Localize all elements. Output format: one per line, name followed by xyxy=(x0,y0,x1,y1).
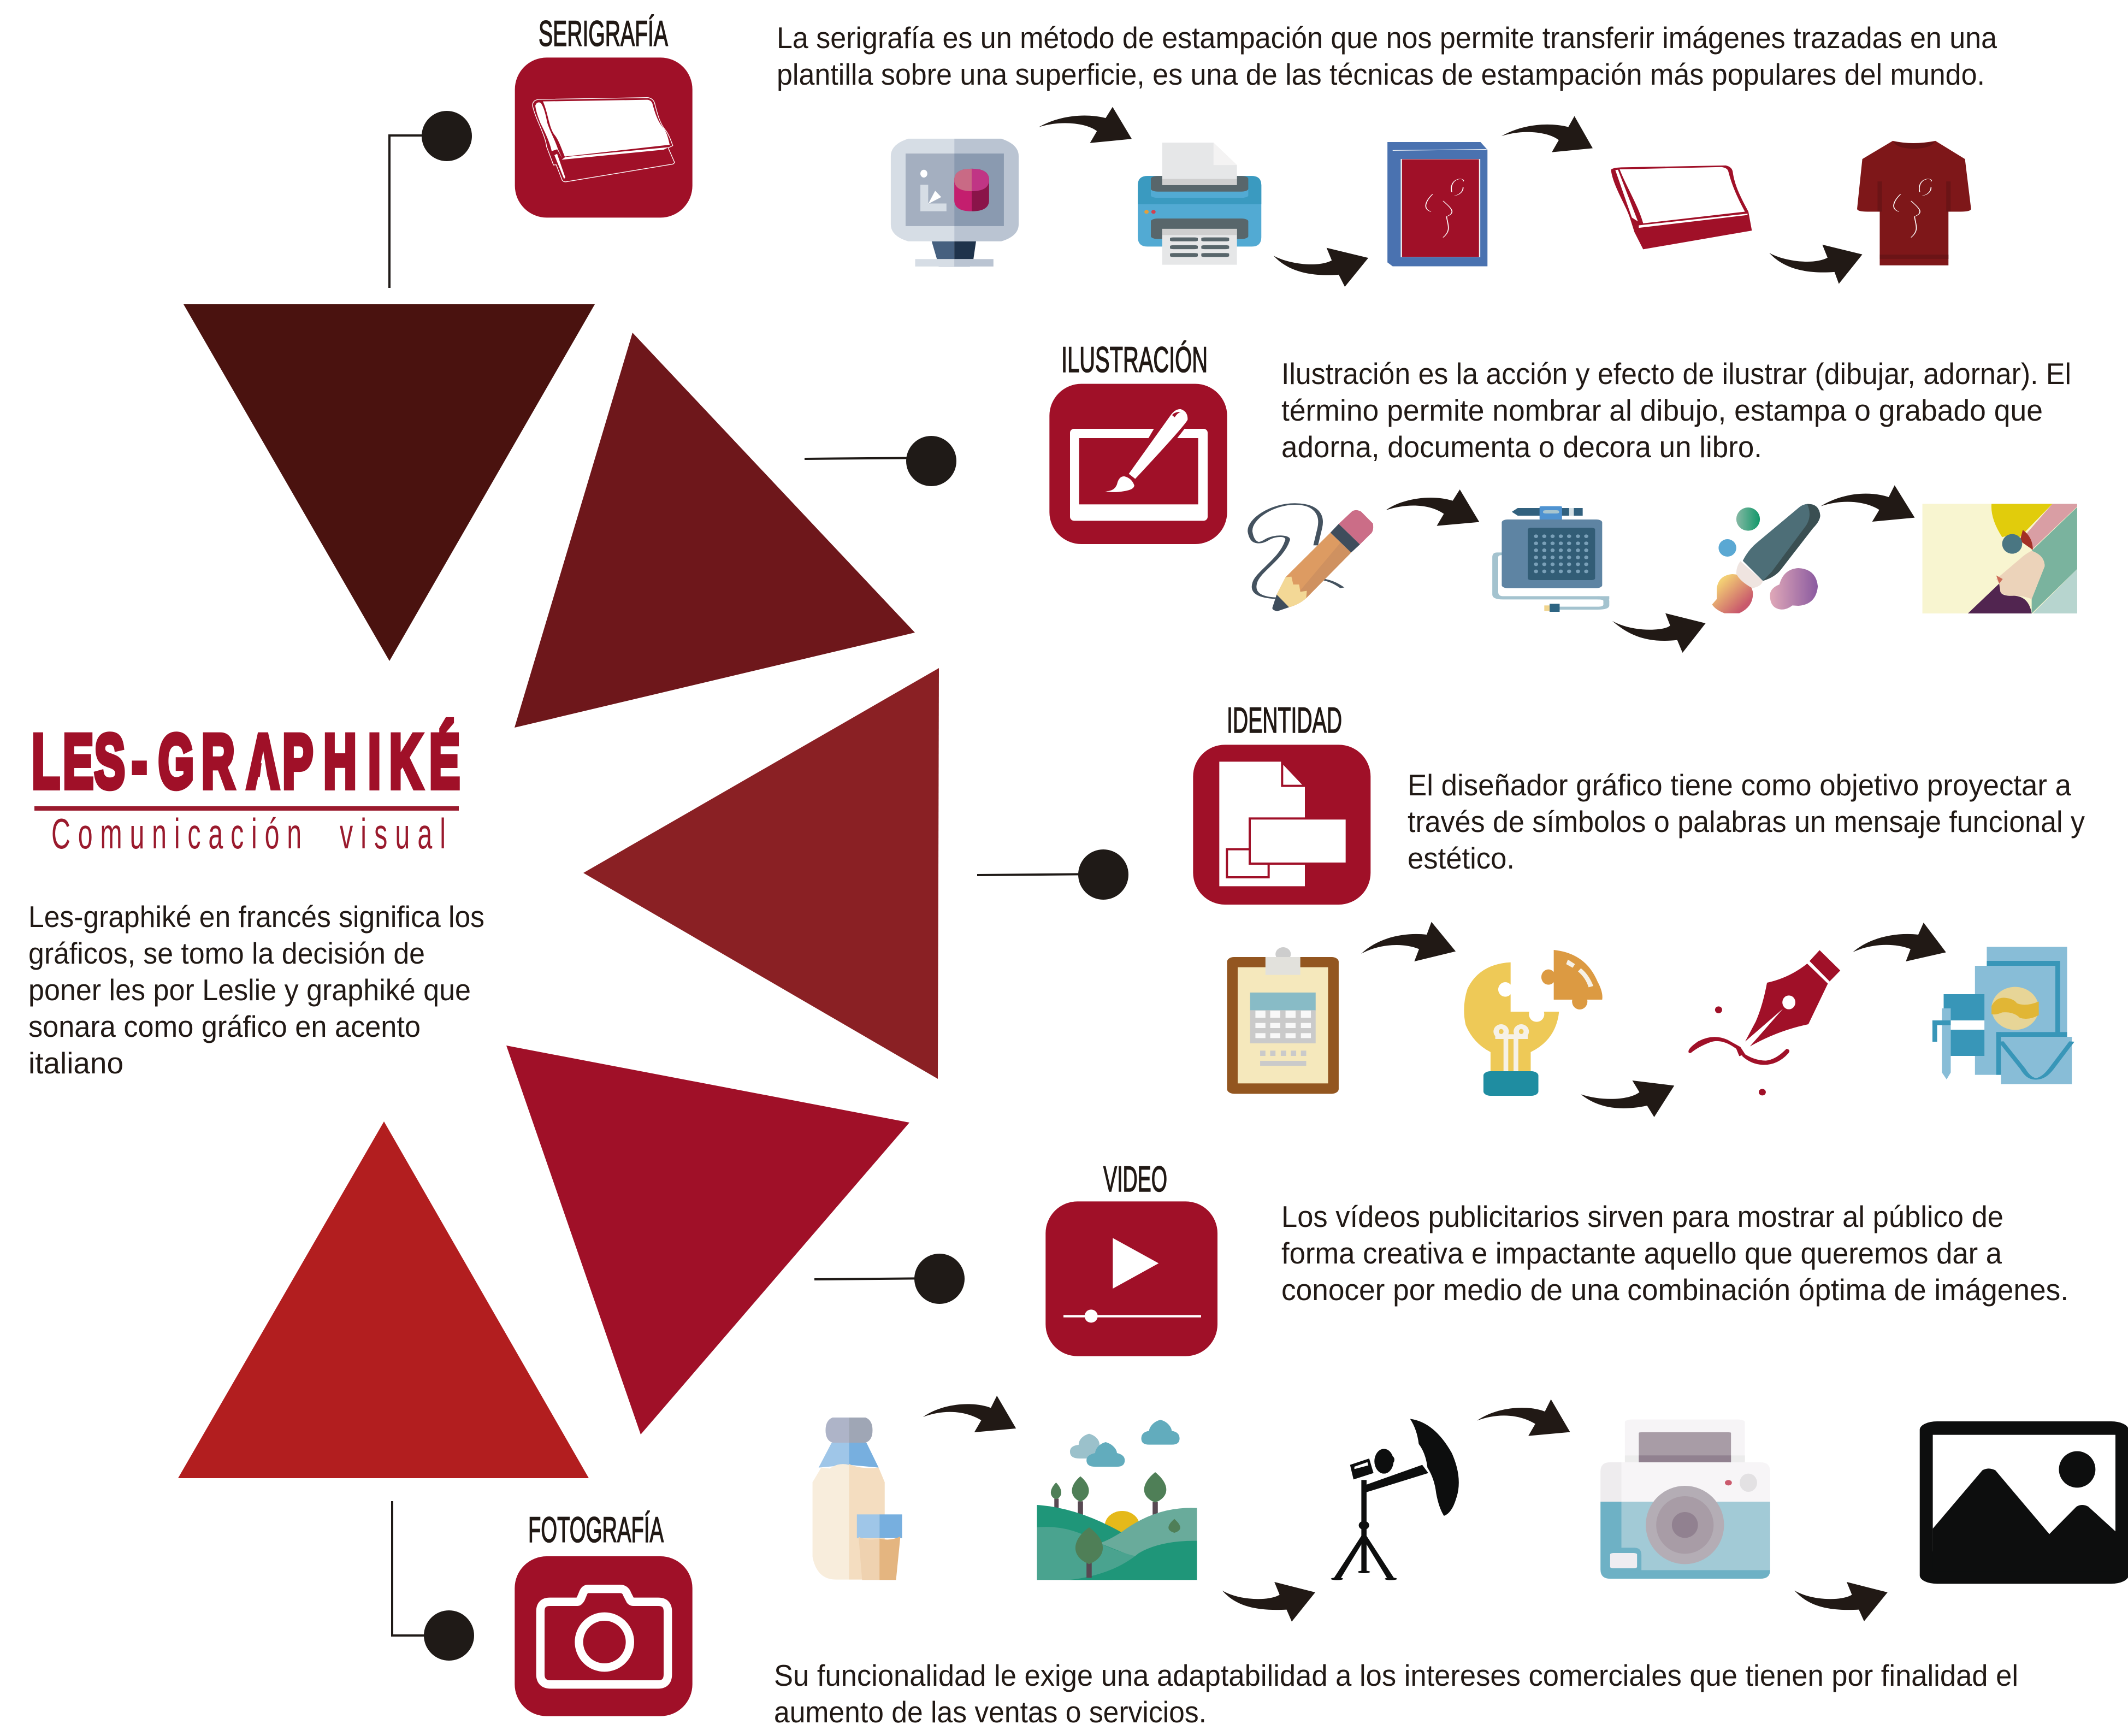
intro text block: gráficos, se tomo la decisión de xyxy=(28,936,425,970)
icon: brand stationery xyxy=(1932,947,2072,1084)
intro text block: sonara como gráfico en acento xyxy=(28,1009,421,1043)
icon: light bulb xyxy=(1464,950,1603,1096)
connector: video xyxy=(814,1254,965,1304)
image: portrait illustration xyxy=(1923,504,2077,613)
arrow xyxy=(1502,116,1593,152)
text: identidad xyxy=(1408,768,2085,875)
logo: LES-GRAPHIKÉ xyxy=(32,719,460,804)
arrow xyxy=(1039,107,1132,143)
text: video: Los vídeos publicitarios sirven para mostrar al público de xyxy=(1281,1200,2003,1233)
fotografía process icons xyxy=(813,1396,2128,1622)
text: identidad: estético. xyxy=(1408,841,1515,875)
icon: tablet with brush xyxy=(1049,384,1227,544)
icon: camera xyxy=(515,1556,693,1716)
heading: video: VIDEO xyxy=(1103,1159,1167,1199)
arrow xyxy=(1821,485,1914,522)
intro text block: poner les por Leslie y graphiké que xyxy=(28,973,471,1007)
text: serigrafía xyxy=(777,21,1997,91)
arrow xyxy=(1853,923,1946,961)
text: video: forma creativa e impactante aquello que queremos dar a xyxy=(1281,1236,2002,1270)
text: ilustración: Ilustración es la acción y efecto de ilustrar (dibujar, adornar). El xyxy=(1281,357,2071,391)
text: ilustración xyxy=(1281,357,2071,464)
text: video: conocer por medio de una combinación óptima de imágenes. xyxy=(1281,1273,2068,1307)
text: identidad: El diseñador gráfico tiene como objetivo proyectar a xyxy=(1408,768,2071,802)
icon: monitor xyxy=(891,139,1019,267)
icon: instant camera xyxy=(1600,1420,1770,1579)
identidad process icons xyxy=(1227,922,2072,1117)
icon: tripod with umbrella xyxy=(1331,1419,1459,1580)
connector: identidad xyxy=(977,849,1128,900)
triangle: ilustración xyxy=(515,333,915,728)
heading: fotografía: FOTOGRAFÍA xyxy=(528,1509,664,1550)
ilustración process icons xyxy=(1250,485,2077,653)
icon: screen frame xyxy=(1387,142,1487,266)
text: fotografía: Su funcionalidad le exige una adaptabilidad a los intereses comerciales que tienen por finalidad el xyxy=(774,1658,2018,1692)
icon: clipboard xyxy=(1227,947,1339,1094)
icon: video player xyxy=(1045,1201,1217,1356)
arrow xyxy=(1361,922,1456,961)
connector: serigrafía xyxy=(389,111,472,288)
triangle: identidad xyxy=(583,668,939,1079)
connector: fotografía xyxy=(392,1501,474,1661)
text: fotografía: aumento de las ventas o servicios. xyxy=(774,1695,1207,1729)
arrow xyxy=(1386,489,1479,526)
triangle: serigrafía xyxy=(184,304,595,661)
intro text block: italiano xyxy=(28,1046,123,1080)
text: fotografía xyxy=(774,1658,2018,1729)
icon: squeegee xyxy=(515,57,693,217)
text: serigrafía: La serigrafía es un método de estampación que nos permite transferir imágenes trazadas en una xyxy=(777,21,1997,55)
text: ilustración: término permite nombrar al dibujo, estampa o grabado que xyxy=(1281,393,2043,427)
icon: documents xyxy=(1193,745,1370,905)
connector: ilustración xyxy=(805,436,956,486)
arrow xyxy=(1274,248,1368,287)
icon: squeegee colour xyxy=(1611,166,1752,249)
icon: image placeholder xyxy=(1920,1421,2128,1584)
triangle: video xyxy=(506,1046,909,1434)
icon: t-shirt xyxy=(1857,141,1971,265)
text: ilustración: adorna, documenta o decora un libro. xyxy=(1281,430,1762,464)
heading: ilustración: ILUSTRACIÓN xyxy=(1061,339,1208,380)
icon: milk bottle xyxy=(813,1418,902,1580)
intro text block xyxy=(28,900,484,1080)
intro text block: Les-graphiké en francés significa los xyxy=(28,900,484,934)
text: video xyxy=(1281,1200,2068,1307)
icon: pencil xyxy=(1250,504,1373,611)
arrow xyxy=(1581,1080,1674,1117)
triangle: fotografía xyxy=(178,1121,589,1478)
icon: brush and paint xyxy=(1712,504,1820,613)
logo: visual xyxy=(340,810,446,858)
icon: printer xyxy=(1138,143,1261,265)
logo xyxy=(32,719,460,858)
arrow xyxy=(1477,1400,1570,1436)
icon: landscape xyxy=(1037,1420,1197,1580)
serigrafía process icons xyxy=(891,107,1971,287)
text: identidad: través de símbolos o palabras un mensaje funcional y xyxy=(1408,805,2085,839)
arrow xyxy=(1222,1582,1315,1622)
arrow xyxy=(1794,1582,1888,1621)
icon: graphics tablet xyxy=(1492,506,1609,612)
logo: Comunicación xyxy=(51,810,302,858)
heading: identidad: IDENTIDAD xyxy=(1227,700,1342,740)
heading: serigrafía: SERIGRAFÍA xyxy=(539,13,668,54)
arrow xyxy=(1769,245,1863,284)
arrow xyxy=(923,1396,1016,1432)
arrow xyxy=(1612,613,1706,653)
icon: fountain pen xyxy=(1688,950,1840,1095)
text: serigrafía: plantilla sobre una superficie, es una de las técnicas de estampación más populares del mundo. xyxy=(777,57,1985,91)
